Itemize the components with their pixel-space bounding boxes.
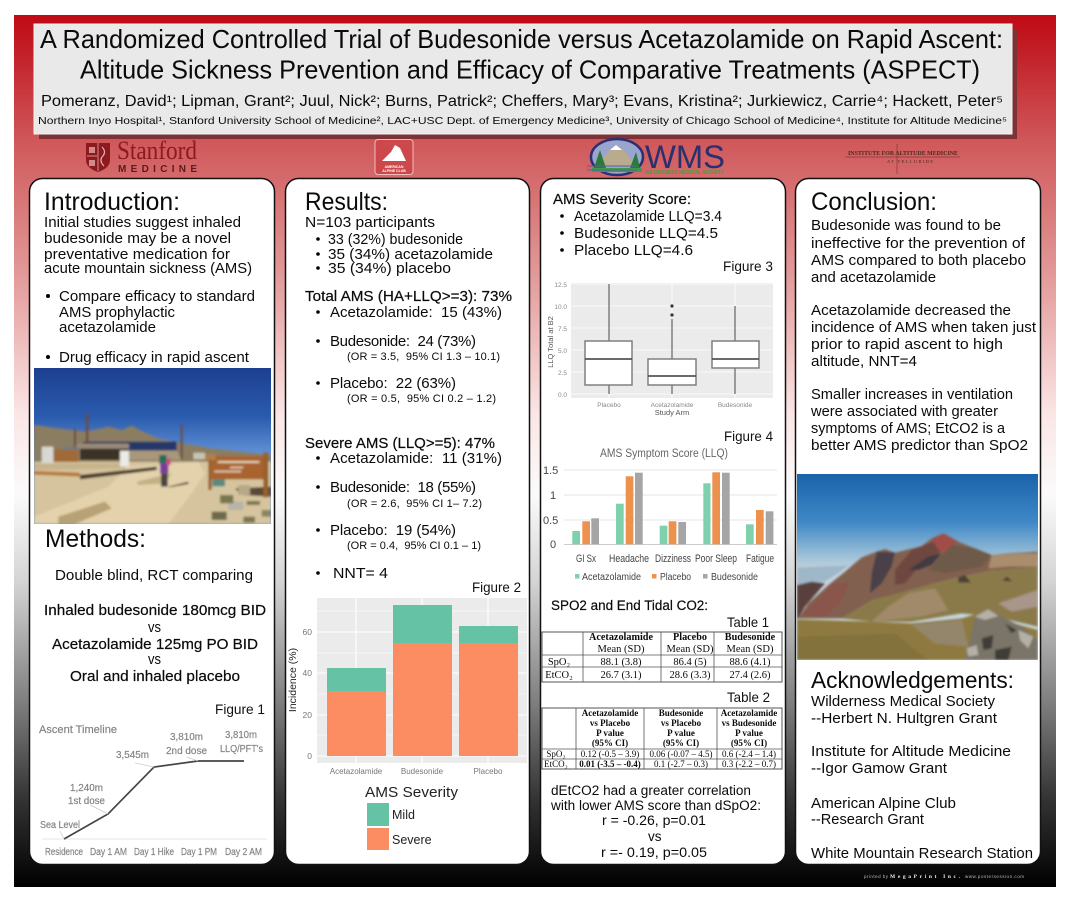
logo: Wilderness Medical Society: WMS — [645, 139, 725, 175]
legend: treatment groups — [575, 572, 758, 583]
grouped bar chart: AMS symptom score: Headache — [609, 553, 649, 565]
text block: AMS severity score: Budesonide LLQ=4.5 — [574, 225, 718, 242]
text block: severe AMS: Budesonide: 18 (55%) — [330, 479, 476, 496]
table 1: means: 28.6 (3.3) — [669, 670, 711, 681]
text block: methods: Double blind, RCT comparing — [55, 567, 253, 584]
box plot: LLQ total by study arm — [546, 282, 773, 417]
printer credit — [864, 874, 1024, 880]
box plot: LLQ total by study arm: Budesonide — [718, 402, 753, 409]
heading: Conclusion: Conclusion: — [811, 188, 937, 216]
table 1: means: 88.6 (4.1) — [729, 657, 771, 668]
stacked bar chart: AMS incidence: 20 — [303, 710, 312, 720]
printer credit: printed by — [864, 874, 889, 879]
text block: acknowledgements: White Mountain Research Station — [811, 845, 1033, 862]
table 2: p values: P value — [735, 728, 763, 738]
table 2: p values: EtCO₂ — [544, 759, 568, 769]
box plot: LLQ total by study arm: 2.5 — [558, 370, 567, 377]
text block: introduction: acute mountain sickness (AMS) — [44, 260, 252, 277]
text block: conclusions — [810, 217, 1037, 454]
table 2: p values: (95% CI) — [663, 738, 699, 748]
grouped bar chart: AMS symptom score: Poor Sleep — [695, 553, 737, 565]
line chart: ascent timeline: 1,240m — [70, 783, 103, 794]
text block: acknowledgements: Wilderness Medical Society — [811, 693, 995, 710]
text block: correlation — [550, 783, 761, 860]
text block: severe AMS: Acetazolamide: 11 (31%) — [330, 450, 502, 467]
text block: conclusions: better AMS predictor than SpO2 — [811, 437, 1028, 454]
table 1: means: SpO₂ — [548, 657, 571, 668]
line chart: ascent timeline: Sea Level — [40, 820, 80, 831]
text block: acknowledgements: Institute for Altitude Medicine — [811, 743, 1011, 760]
text block: total AMS: (OR = 3.5, 95% CI 1.3 – 10.1) — [347, 351, 500, 363]
printer credit: MegaPrint Inc. — [890, 874, 961, 880]
logo: Stanford Medicine — [86, 136, 197, 175]
box plot: LLQ total by study arm: LLQ Total at B2 — [546, 316, 555, 368]
box plot: LLQ total by study arm: Placebo — [597, 402, 621, 409]
text block: conclusions: prior to rapid ascent to high — [811, 336, 1003, 353]
table 2: p values: Acetazolamide — [721, 708, 777, 718]
logo: Institute for Altitude Medicine — [845, 144, 960, 174]
box plot: LLQ total by study arm: Acetazolamide — [651, 402, 694, 409]
legend: treatment groups: Budesonide — [711, 572, 758, 583]
text block: conclusions: altitude, NNT=4 — [811, 353, 917, 370]
text block: severe AMS: Severe AMS (LLQ>=5): 47% — [305, 435, 495, 452]
text block: severe AMS: Placebo: 19 (54%) — [330, 522, 456, 539]
text block: severe AMS: (OR = 0.4, 95% CI 0.1 – 1) — [347, 540, 481, 552]
photo: mountain peak — [797, 474, 1038, 660]
text block: correlation: vs — [648, 829, 662, 844]
text block: correlation: r = -0.26, p=0.01 — [602, 813, 706, 828]
affiliations: Northern Inyo Hospital¹, Stanford University School of Medicine², LAC+USC Dept. of Emergency Medicine³, University of Chicago School of Medicine⁴, Institute for Altitude Medicine⁵ — [38, 115, 1007, 127]
logo: Wilderness Medical Society — [587, 139, 725, 176]
stacked bar chart: AMS incidence: Budesonide — [401, 767, 444, 776]
caption: Table 1: Table 1 — [727, 614, 769, 630]
legend: AMS severity: Mild — [392, 808, 415, 822]
caption: Table 2: Table 2 — [727, 689, 770, 705]
title: A Randomized Controlled Trial of Budesonide versus Acetazolamide on Rapid Ascent: — [40, 24, 1003, 54]
grouped bar chart: AMS symptom score: 1.5 — [543, 465, 558, 477]
logo: Institute for Altitude Medicine: AT TELLURIDE — [887, 159, 933, 164]
authors: Pomeranz, David¹; Lipman, Grant²; Juul, Nick²; Burns, Patrick²; Cheffers, Mary³; Evans, Kristina²; Jurkiewicz, Carrie⁴; Hackett, Peter⁵ — [41, 93, 1003, 110]
grouped bar chart: AMS symptom score: 1 — [550, 490, 556, 502]
heading: Results: Results: — [305, 188, 388, 216]
panel: conclusion and acknowledgements — [796, 178, 1040, 864]
box plot: LLQ total by study arm: 5.0 — [558, 348, 567, 355]
table 1: means: Mean (SD) — [727, 644, 774, 655]
text block: conclusions: AMS compared to both placebo — [811, 252, 1026, 269]
text block: AMS severity score — [553, 191, 722, 259]
photo: research station — [34, 368, 271, 524]
text block: methods: vs — [148, 619, 161, 636]
grouped bar chart: AMS symptom score: Fatigue — [746, 553, 774, 565]
text block: acknowledgements — [811, 693, 1033, 862]
text block: conclusions: and acetazolamide — [811, 269, 936, 286]
text block: severe AMS: NNT= 4 — [333, 565, 388, 582]
box plot: LLQ total by study arm: Study Arm — [655, 408, 689, 417]
grouped bar chart: AMS symptom score: 0 — [550, 539, 556, 551]
legend: treatment groups: Acetazolamide — [582, 572, 641, 583]
grouped bar chart: AMS symptom score: GI Sx — [576, 553, 596, 565]
panel: results — [286, 178, 530, 864]
logo: American Alpine Club — [375, 140, 413, 174]
heading: Methods: Methods: — [45, 525, 146, 553]
logo: Wilderness Medical Society: WILDERNESS MEDICAL SOCIETY — [645, 170, 725, 176]
text block: AMS severity score: Placebo LLQ=4.6 — [574, 242, 693, 259]
text block: participants: 35 (34%) placebo — [328, 260, 451, 277]
line chart: ascent timeline: Day 1 PM — [181, 847, 217, 858]
table 2: p values: SpO₂ — [546, 749, 566, 759]
table 2: p values: 0.06 (-0.07 – 4.5) — [650, 749, 712, 759]
table 1: means: 26.7 (3.1) — [600, 670, 642, 681]
text block: conclusions: Budesonide was found to be — [811, 217, 1001, 234]
text block: participants: 33 (32%) budesonide — [328, 231, 463, 248]
stacked bar chart: AMS incidence: 60 — [303, 627, 312, 637]
line chart: ascent timeline: Day 2 AM — [225, 847, 262, 858]
text block: acknowledgements: American Alpine Club — [811, 795, 956, 812]
heading: Introduction: Introduction: — [44, 188, 180, 216]
table 1: means: Mean (SD) — [598, 644, 645, 655]
heading: SPO2 and End Tidal CO2: SPO2 and End Tidal CO2: — [551, 598, 708, 613]
text block: methods: vs — [148, 651, 161, 668]
line chart: ascent timeline: 1st dose — [68, 796, 105, 807]
stacked bar chart: AMS incidence: Acetazolamide — [330, 767, 383, 776]
text block: introduction: preventative medication for — [44, 246, 230, 263]
table 1: means: Placebo — [673, 632, 707, 643]
table 2: p values: P value — [667, 728, 695, 738]
text block: participants — [305, 214, 493, 277]
line chart: ascent timeline: 2nd dose — [166, 746, 207, 757]
logo: American Alpine Club: ALPINE CLUB — [382, 169, 406, 173]
bullet list: aims — [46, 288, 255, 366]
line chart: ascent timeline: Ascent Timeline — [39, 724, 117, 736]
caption: Figure 1: Figure 1 — [215, 701, 265, 717]
text block: introduction — [44, 214, 252, 277]
table 2: p values: 0.01 (-3.5 – -0.4) — [579, 759, 641, 769]
text block: conclusions: symptoms of AMS; EtCO2 is a — [811, 420, 1006, 437]
bullet list: aims: AMS prophylactic — [59, 304, 175, 321]
text block: correlation: r =- 0.19, p=0.05 — [601, 845, 707, 860]
table 1: means: Acetazolamide — [589, 632, 653, 643]
text block: AMS severity score: Acetazolamide LLQ=3.4 — [574, 208, 722, 225]
table 1: means: 86.4 (5) — [673, 657, 707, 668]
bullet list: aims: acetazolamide — [59, 319, 156, 336]
stacked bar chart: AMS incidence — [287, 598, 527, 850]
panel: severity scores and physiology — [540, 178, 786, 864]
title: Altitude Sickness Prevention and Efficacy of Comparative Treatments (ASPECT) — [80, 54, 980, 84]
text block: total AMS: Total AMS (HA+LLQ>=3): 73% — [305, 288, 512, 305]
table 1: means — [542, 632, 782, 682]
text block: conclusions: Smaller increases in ventilation — [811, 386, 1013, 403]
table 1: means: Budesonide — [725, 632, 776, 643]
table 2: p values: P value — [596, 728, 624, 738]
text block: participants: N=103 participants — [305, 214, 435, 231]
text block: participants: 35 (34%) acetazolamide — [328, 246, 493, 263]
text block: methods — [44, 567, 266, 685]
text block: AMS severity score: AMS Severity Score: — [553, 191, 691, 208]
box plot: LLQ total by study arm: 7.5 — [558, 326, 567, 333]
table 2: p values — [542, 708, 782, 769]
text block: total AMS — [305, 288, 512, 405]
logo: Stanford Medicine: MEDICINE — [118, 164, 197, 175]
title banner — [34, 24, 1017, 139]
box plot: LLQ total by study arm: 10.0 — [554, 304, 567, 311]
text block: total AMS: Placebo: 22 (63%) — [330, 375, 456, 392]
table 2: p values: Acetazolamide — [582, 708, 638, 718]
panel: introduction and methods — [30, 178, 274, 864]
table 2: p values: 0.3 (-2.2 – 0.7) — [722, 759, 776, 769]
text block: acknowledgements: --Research Grant — [811, 811, 925, 828]
box plot: LLQ total by study arm: 12.5 — [554, 282, 567, 289]
table 2: p values: 0.6 (-2.4 – 1.4) — [722, 749, 776, 759]
text block: correlation: with lower AMS score than dSpO2: — [550, 798, 761, 813]
text block: methods: Inhaled budesonide 180mcg BID — [44, 602, 266, 619]
table 2: p values: (95% CI) — [592, 738, 628, 748]
text block: conclusions: Acetazolamide decreased the — [811, 302, 1011, 319]
line chart: ascent timeline: 3,810m — [170, 732, 203, 743]
text block: total AMS: Acetazolamide: 15 (43%) — [330, 304, 502, 321]
grouped bar chart: AMS symptom score — [543, 448, 777, 583]
table 2: p values: (95% CI) — [731, 738, 767, 748]
bullet list: aims: Compare efficacy to standard — [59, 288, 255, 305]
text block: correlation: dEtCO2 had a greater correlation — [551, 783, 751, 798]
printer credit: www.postersession.com — [965, 874, 1024, 879]
table 2: p values: 0.12 (-0.5 – 3.9) — [581, 749, 639, 759]
text block: severe AMS — [305, 435, 502, 582]
title — [40, 24, 1003, 84]
legend: AMS severity: Severe — [392, 833, 432, 847]
caption: Figure 2: Figure 2 — [472, 579, 521, 595]
line chart: ascent timeline: LLQ/PFT's — [220, 744, 263, 755]
table 2: p values: 0.1 (-2.7 – 0.3) — [654, 759, 708, 769]
line chart: ascent timeline: 3,810m — [225, 730, 257, 741]
text block: introduction: budesonide may be a novel — [44, 230, 231, 247]
line chart: ascent timeline: Day 1 AM — [90, 847, 127, 858]
box plot: LLQ total by study arm: 0.0 — [558, 392, 567, 399]
stacked bar chart: AMS incidence: Placebo — [474, 767, 503, 776]
text block: total AMS: Budesonide: 24 (73%) — [330, 333, 476, 350]
grouped bar chart: AMS symptom score: AMS Symptom Score (LLQ) — [600, 448, 728, 460]
logo: American Alpine Club: AMERICAN — [385, 165, 404, 169]
text block: severe AMS: (OR = 2.6, 95% CI 1– 7.2) — [347, 498, 482, 510]
text block: conclusions: ineffective for the prevention of — [811, 235, 1026, 252]
text block: acknowledgements: --Igor Gamow Grant — [811, 760, 948, 777]
text block: total AMS: (OR = 0.5, 95% CI 0.2 – 1.2) — [347, 393, 496, 405]
table 1: means: EtCO₂ — [545, 670, 573, 681]
table 2: p values: Budesonide — [659, 708, 703, 718]
legend: AMS severity — [365, 784, 459, 850]
grouped bar chart: AMS symptom score: 0.5 — [543, 515, 558, 527]
logo: Institute for Altitude Medicine: INSTITUTE FOR ALTITUDE MEDICINE — [848, 150, 958, 157]
line chart: ascent timeline — [39, 724, 267, 858]
stacked bar chart: AMS incidence: Incidence (%) — [287, 648, 299, 712]
table 1: means: Mean (SD) — [667, 644, 714, 655]
text block: introduction: Initial studies suggest inhaled — [44, 214, 241, 231]
text block: conclusions: incidence of AMS when taken just — [811, 319, 1037, 336]
heading: Acknowledgements: Acknowledgements: — [811, 667, 1014, 693]
text block: acknowledgements: --Herbert N. Hultgren Grant — [811, 710, 998, 727]
stacked bar chart: AMS incidence: 40 — [303, 668, 312, 678]
stacked bar chart: AMS incidence: 0 — [307, 751, 312, 761]
text block: methods: Oral and inhaled placebo — [70, 668, 240, 685]
grouped bar chart: AMS symptom score: Dizziness — [655, 553, 691, 565]
line chart: ascent timeline: Day 1 Hike — [134, 847, 174, 858]
table 2: p values: vs Placebo — [661, 718, 702, 728]
table 2: p values: vs Placebo — [590, 718, 631, 728]
text block: methods: Acetazolamide 125mg PO BID — [52, 636, 258, 653]
table 1: means: 27.4 (2.6) — [729, 670, 771, 681]
logo: Stanford Medicine: Stanford — [117, 136, 197, 165]
legend: treatment groups: Placebo — [660, 572, 691, 583]
caption: Figure 3: Figure 3 — [723, 258, 773, 274]
text block: conclusions: were associated with greater — [810, 403, 998, 420]
bullet list: aims: Drug efficacy in rapid ascent — [59, 349, 250, 366]
table 1: means: 88.1 (3.8) — [600, 657, 642, 668]
line chart: ascent timeline: 3,545m — [116, 750, 149, 761]
line chart: ascent timeline: Residence — [45, 847, 83, 858]
legend: AMS severity: AMS Severity — [365, 784, 459, 801]
table 2: p values: vs Budesonide — [722, 718, 776, 728]
caption: Figure 4: Figure 4 — [724, 428, 773, 444]
